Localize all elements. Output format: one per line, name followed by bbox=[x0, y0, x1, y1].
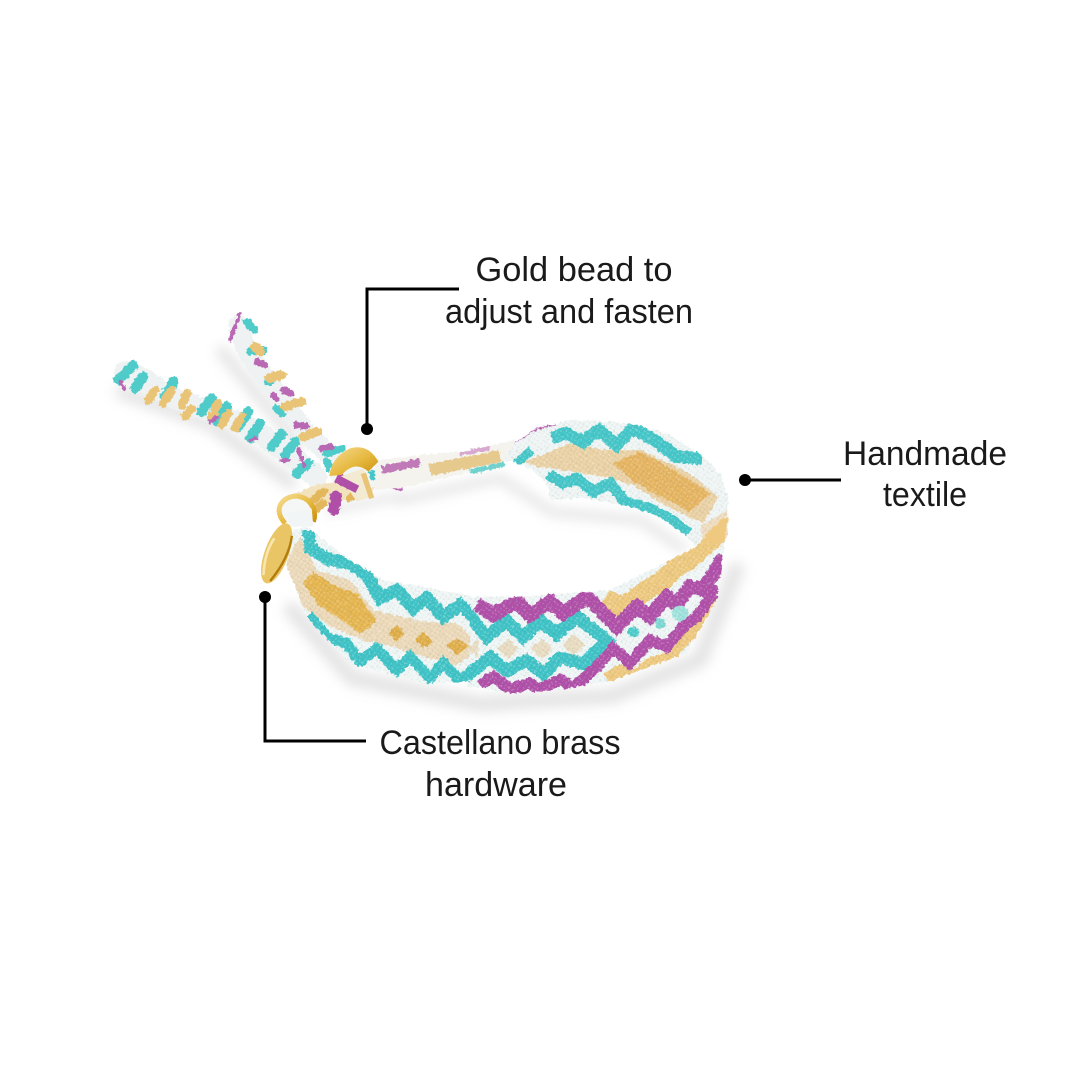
tan centre bbox=[525, 443, 718, 523]
tail joining band bbox=[375, 440, 515, 490]
label: textile: textile bbox=[883, 476, 967, 514]
dot: brass hardware bbox=[259, 591, 271, 603]
icon: gold bead bbox=[329, 447, 378, 476]
tan diamond field bbox=[285, 537, 483, 665]
leader line: handmade textile bbox=[745, 478, 841, 482]
icon: brass ring bbox=[279, 496, 315, 523]
front of band, right part bbox=[463, 513, 734, 700]
tail to band bbox=[340, 473, 400, 478]
tail to ring bbox=[290, 477, 377, 507]
teal chevrons bbox=[308, 530, 480, 622]
gold hardware bbox=[255, 447, 378, 587]
dot: handmade textile bbox=[739, 474, 751, 486]
label: hardware: hardware bbox=[425, 766, 567, 804]
teal chevrons bbox=[463, 608, 607, 678]
label: adjust and fasten: adjust and fasten bbox=[445, 293, 693, 331]
label: gold bead: Gold bead to bbox=[476, 251, 672, 289]
dot: gold bead bbox=[361, 423, 373, 435]
left cord bbox=[118, 365, 317, 477]
infographic canvas bbox=[112, 256, 1006, 796]
back of band bbox=[506, 420, 729, 548]
purple chevrons bbox=[477, 557, 723, 627]
teal zigzags bbox=[552, 428, 702, 458]
callout: brass hardware bbox=[259, 591, 620, 804]
label: handmade: Handmade bbox=[843, 435, 1007, 473]
callout: gold bead bbox=[361, 251, 693, 435]
icon: brass tag bbox=[255, 519, 299, 587]
bracelet photo illustration bbox=[118, 314, 737, 704]
drop shadow bbox=[122, 352, 736, 704]
front of band, left part bbox=[286, 526, 472, 684]
gold chevrons bbox=[605, 518, 728, 608]
callout: handmade textile bbox=[739, 435, 1007, 514]
braided cords bbox=[118, 314, 400, 509]
leader line: brass hardware bbox=[265, 597, 366, 741]
inner teal dots bbox=[628, 627, 639, 638]
beige diamonds bbox=[467, 634, 586, 659]
label: castellano brass: Castellano brass bbox=[380, 724, 620, 762]
right cord bbox=[230, 314, 342, 468]
leader line: gold bead bbox=[367, 289, 459, 429]
